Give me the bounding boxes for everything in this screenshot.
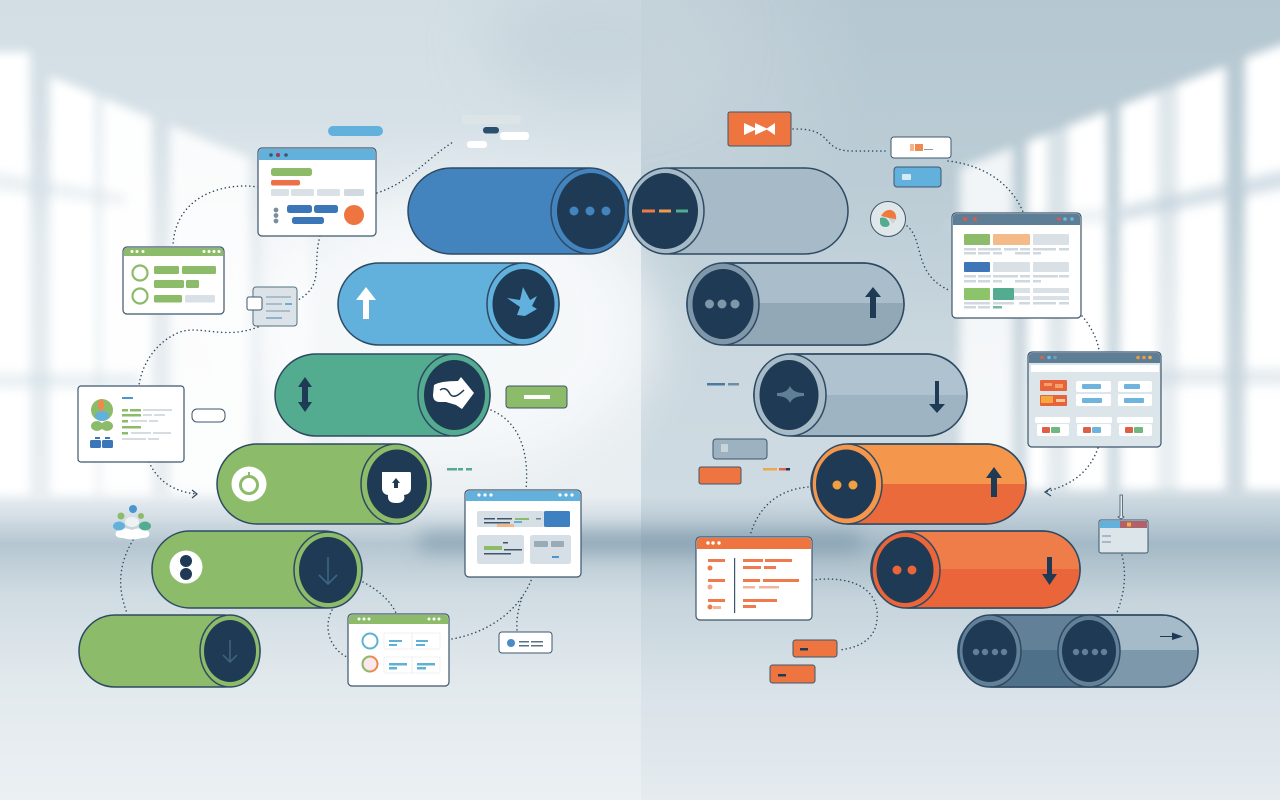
- pill: blue: [408, 168, 629, 254]
- card: grey grid window: [1028, 352, 1161, 447]
- label: empty outlined pill: [192, 409, 225, 422]
- icon: white person badge: [170, 550, 202, 584]
- chips: faded top labels: [461, 115, 529, 148]
- card: table window: [952, 213, 1081, 318]
- label: orange chip: [699, 467, 741, 484]
- pill: grey third right: [754, 354, 967, 436]
- label: water drop note: [499, 632, 552, 653]
- pill: grey top right: [628, 168, 848, 254]
- dashes: slate: [707, 383, 739, 386]
- card: blue data window: [465, 490, 581, 577]
- badge: orange skip icon: [728, 112, 791, 146]
- pill: orange 2: [871, 531, 1080, 608]
- icon: share hand: [433, 377, 474, 409]
- icon: white ring badge: [232, 466, 266, 502]
- icon: brain badge: [870, 202, 906, 236]
- badge: green: [506, 386, 567, 408]
- pill: green 3: [79, 615, 260, 687]
- icon: up arrow: [986, 467, 1002, 497]
- icon: double arrow: [298, 377, 312, 412]
- pill: grey second right: [687, 263, 904, 345]
- label pill: blue top: [328, 126, 383, 136]
- label: blue chip: [894, 167, 941, 187]
- label: orange tag 2: [770, 665, 815, 683]
- icon: up arrow: [356, 287, 376, 319]
- card: profile: [78, 386, 184, 462]
- icon: right arrow: [1160, 632, 1183, 640]
- icon: down arrow: [1042, 557, 1057, 585]
- dashes: tiny orange: [763, 468, 790, 470]
- pill: orange 1: [811, 444, 1026, 524]
- icon: down arrow: [929, 381, 945, 413]
- card: blue header dashboard: [258, 148, 376, 236]
- pill: green 2: [152, 531, 362, 608]
- card: tiny status window: [1099, 520, 1148, 553]
- label: grey chip: [713, 439, 767, 459]
- arrowhead: to green pill: [192, 490, 197, 498]
- icon: people cloud: [113, 505, 151, 540]
- pill: green 1: [217, 444, 431, 524]
- label: white chip: [891, 137, 951, 158]
- icon: diamond spark: [777, 386, 804, 403]
- pill: light blue: [338, 263, 559, 345]
- icon: down arrow: [319, 557, 337, 584]
- icon: leaf star: [507, 287, 537, 316]
- pill: slate double: [958, 615, 1198, 687]
- pill: teal: [275, 354, 490, 436]
- icon: thin down arrow: [1118, 495, 1124, 519]
- dotted connectors: [121, 129, 1124, 657]
- label: orange tag 1: [793, 640, 837, 657]
- icon: up arrow: [865, 287, 881, 318]
- card: green rings window: [348, 614, 449, 686]
- card: green status list: [123, 247, 224, 314]
- dashes: teal: [447, 468, 472, 470]
- card: small note with tab: [247, 287, 297, 326]
- icon: upload tag: [382, 472, 411, 503]
- card: orange list window: [696, 537, 812, 620]
- arrowhead: to orange pill: [1045, 488, 1051, 496]
- icon: down arrow: [223, 640, 237, 662]
